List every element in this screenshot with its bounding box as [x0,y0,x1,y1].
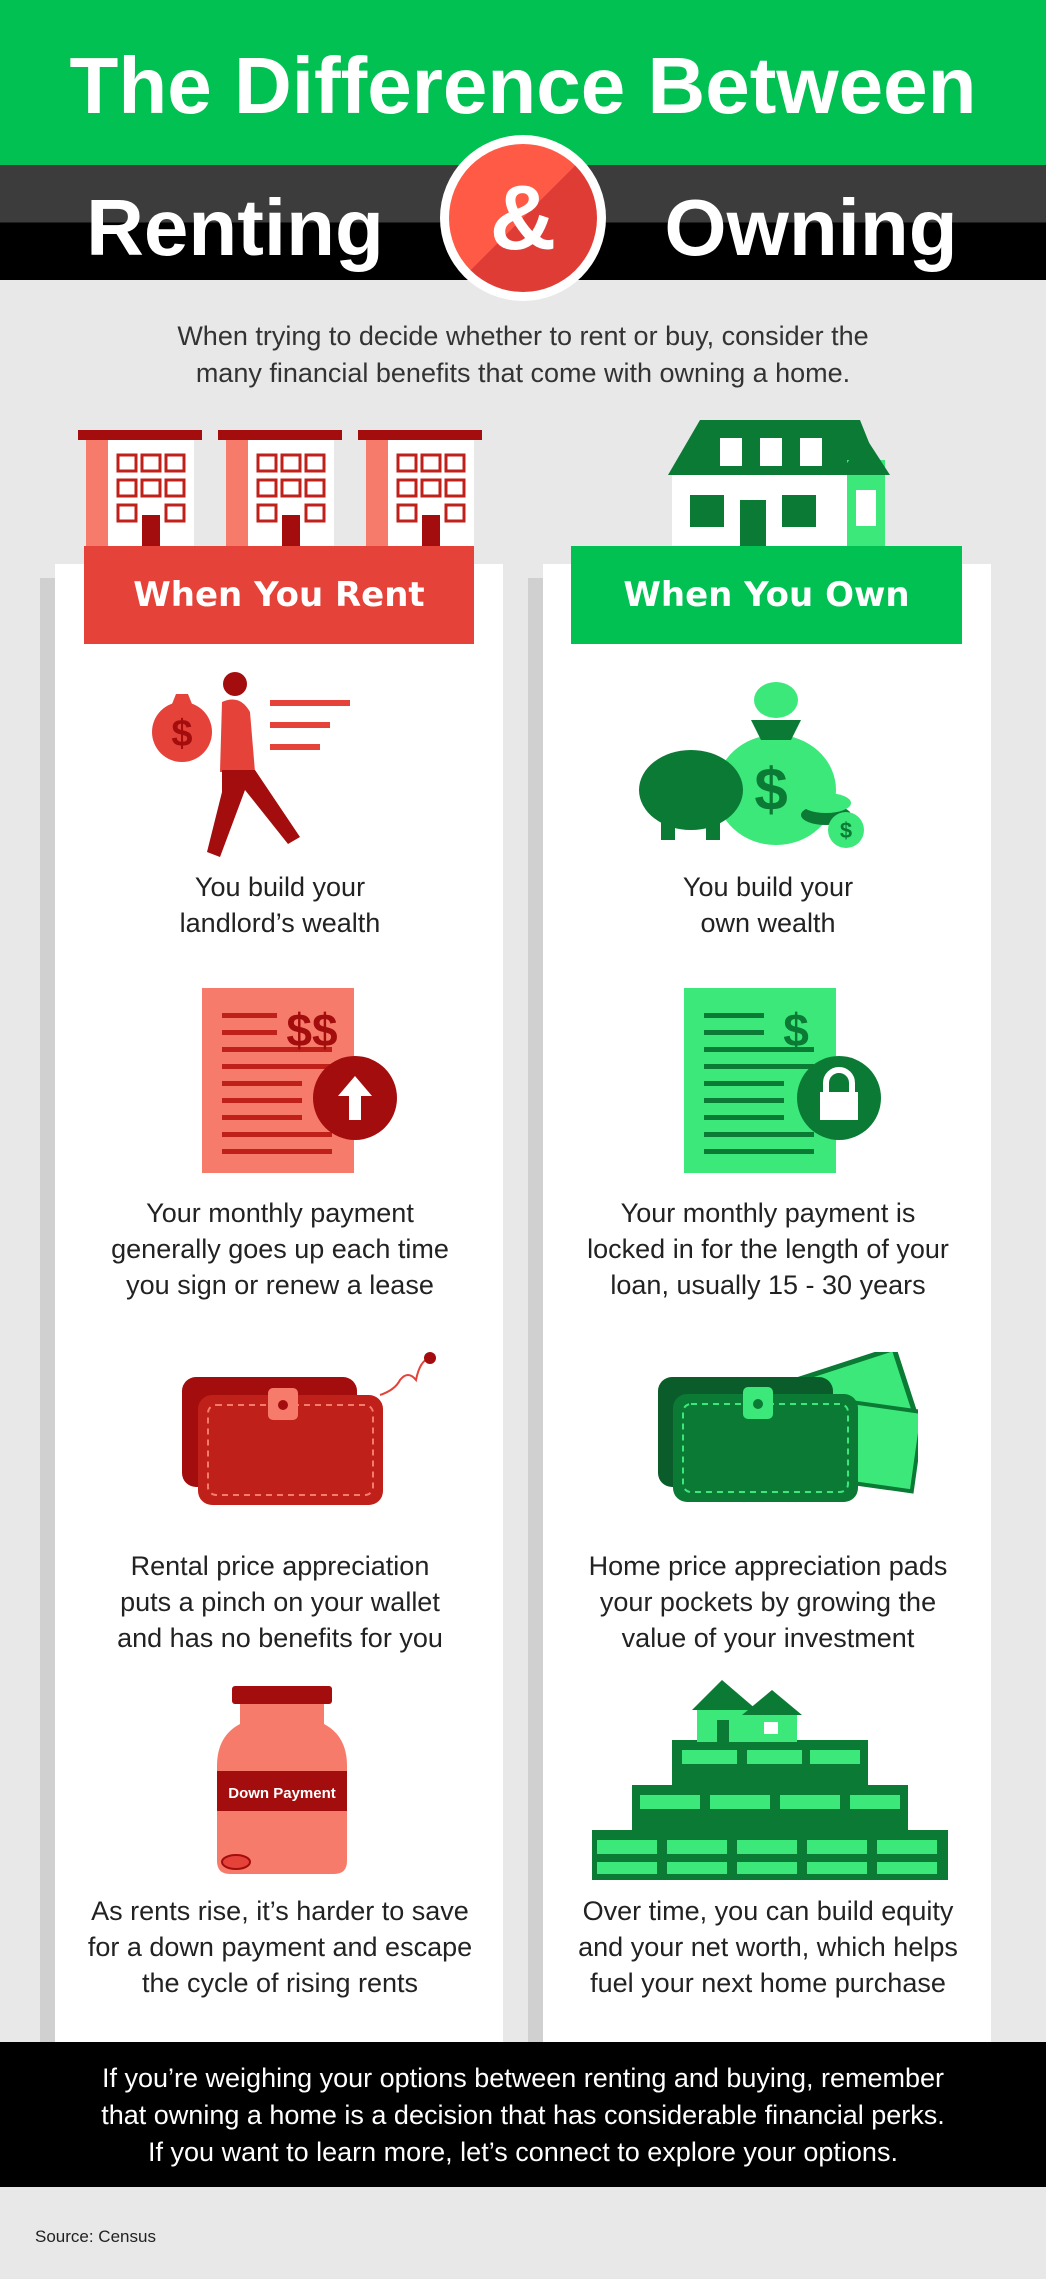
text: own 2: loan, usually 15 - 30 years [610,1270,926,1300]
intro text: many financial benefits that come with owning a home. [196,358,850,388]
panel: rent [40,564,503,2042]
banner: When You Own: When You Own [623,575,910,615]
text: own 3: Home price appreciation pads [589,1551,947,1581]
text: rent 3: and has no benefits for you [117,1623,443,1653]
panel: own [528,564,991,2042]
footer text: If you’re weighing your options between renting and buying, remember [102,2063,944,2093]
text: own 4 [578,1896,958,1998]
text: rent 4: As rents rise, it’s harder to save [91,1896,469,1926]
text: rent 3: Rental price appreciation [131,1551,429,1581]
text: own 1: own wealth [700,908,836,938]
footer text [101,2063,945,2167]
text: own 4: fuel your next home purchase [590,1968,946,1998]
Renting word: Renting [86,183,384,272]
text: rent 3: puts a pinch on your wallet [120,1587,440,1617]
text: rent 1: landlord’s wealth [180,908,380,938]
text: rent 1: You build your [195,872,365,902]
icon: piggy bank and money bag: $ [754,756,788,823]
text: rent 3 [117,1551,443,1653]
banner: When You Own [571,546,962,644]
footer text: If you want to learn more, let’s connect to explore your options. [148,2137,898,2167]
icon: house on pile of money [592,1680,948,1880]
title: The Difference Between [70,41,976,130]
text: own 4: and your net worth, which helps [578,1932,958,1962]
source: Source: Census [35,2227,156,2246]
icon: document with lock [684,988,881,1173]
intro text: When trying to decide whether to rent or buy, consider the [177,321,869,351]
text: rent 1 [180,872,380,938]
Owning word: Owning [664,183,958,272]
icon: green wallet with cash [658,1352,918,1502]
icon: lease document with up arrow [202,988,397,1173]
icon: red wallet [182,1352,436,1505]
text: own 3: your pockets by growing the [600,1587,936,1617]
icon: person carrying money bag [152,672,350,857]
ampersand circle: & [490,167,556,269]
subtitle bands [0,165,1046,280]
text: own 3: value of your investment [622,1623,914,1653]
text: own 4: Over time, you can build equity [583,1896,953,1926]
icon: apartment buildings [78,430,482,546]
text: rent 4 [88,1896,472,1998]
icon: down payment jar: Down Payment [228,1785,336,1802]
banner: When You Rent: When You Rent [133,575,425,615]
text: own 3 [589,1551,947,1653]
text: rent 2: Your monthly payment [146,1198,414,1228]
icon: piggy bank and money bag: $ [840,818,852,843]
ampersand circle [440,135,606,301]
text: own 1: You build your [683,872,853,902]
footer black band [0,2042,1046,2187]
text: own 1 [683,872,853,938]
text: rent 4: for a down payment and escape [88,1932,472,1962]
icon: document with lock: $ [783,1004,809,1056]
icon: down payment jar [217,1686,347,1874]
header green band [0,0,1046,165]
text: rent 2 [111,1198,449,1300]
icon: person carrying money bag: $ [171,713,193,755]
text: own 2: locked in for the length of your [587,1234,949,1264]
text: rent 2: you sign or renew a lease [126,1270,434,1300]
intro text [177,321,869,388]
text: rent 4: the cycle of rising rents [142,1968,418,1998]
icon: lease document with up arrow: $$ [286,1004,338,1056]
banner: When You Rent [84,546,474,644]
icon: house [668,420,890,546]
text: rent 2: generally goes up each time [111,1234,449,1264]
icon: piggy bank and money bag [639,682,864,848]
text: own 2 [587,1198,949,1300]
text: own 2: Your monthly payment is [621,1198,915,1228]
footer text: that owning a home is a decision that has considerable financial perks. [101,2100,945,2130]
